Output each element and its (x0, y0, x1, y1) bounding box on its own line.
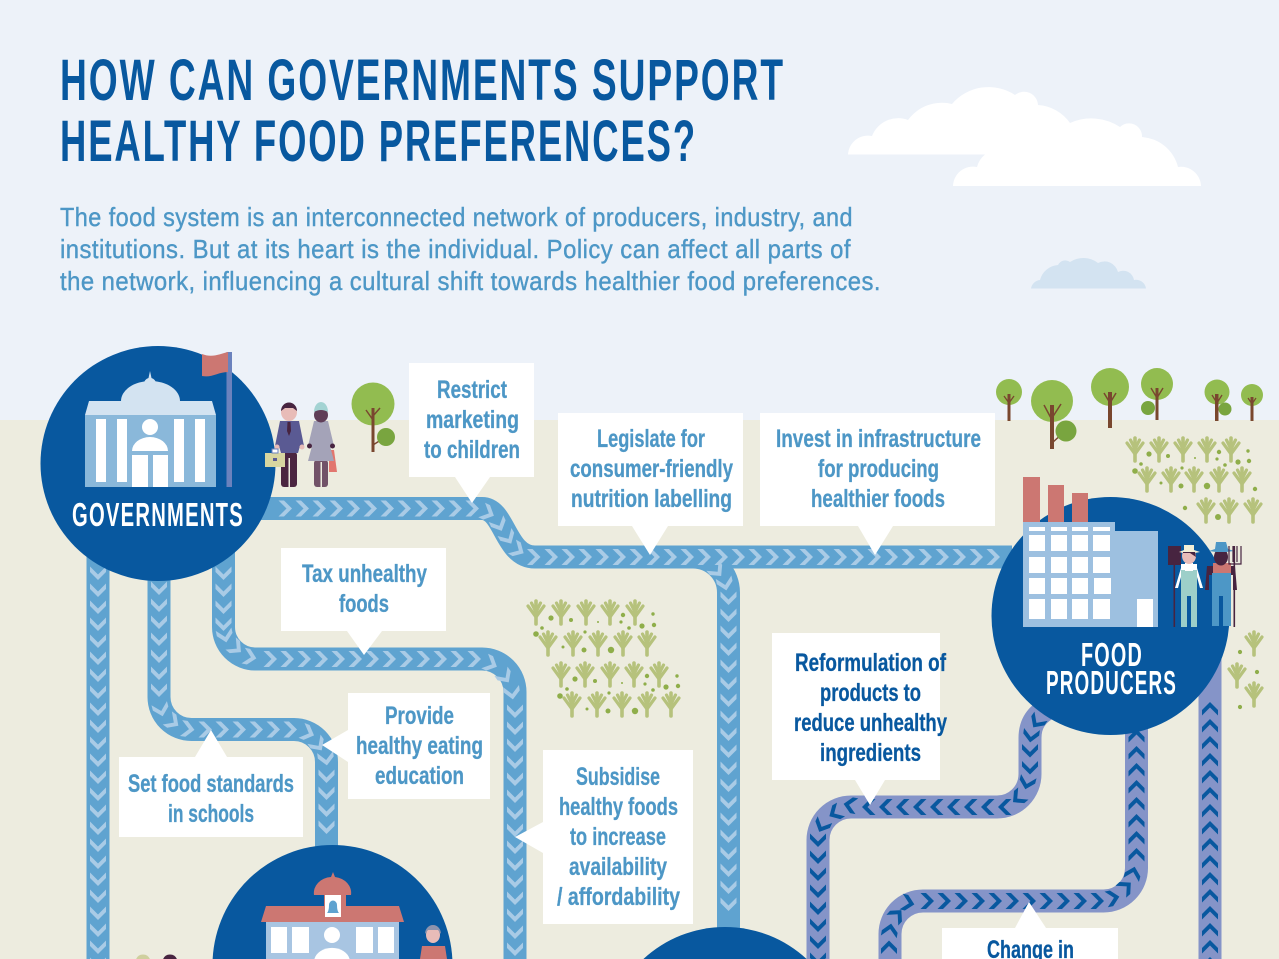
crop field: upper right (1127, 438, 1261, 522)
callout: restrict marketing: Restrict (437, 376, 508, 404)
callout: restrict marketing: to children (424, 436, 520, 464)
callout: subsidise healthy foods: / affordability (557, 883, 680, 911)
tree beside people (352, 382, 395, 452)
intro text: the network, influencing a cultural shift towards healthier food preferences. (60, 266, 881, 296)
person: teacher (420, 925, 447, 959)
path: change in route (881, 725, 1148, 959)
callout: invest in infrastructure: healthier foods (811, 485, 945, 513)
callout: nutrition labelling: consumer-friendly (570, 455, 733, 483)
callout: reformulation of products: products to (820, 679, 921, 707)
callout: food standards in schools: in schools (168, 800, 254, 828)
callout: tax unhealthy foods (281, 548, 446, 655)
callout: healthy eating education: Provide (385, 702, 454, 730)
callout: food standards in schools (119, 730, 303, 837)
callout: reformulation of products: Reformulation of (795, 649, 947, 677)
label: food producers: PRODUCERS (1046, 664, 1177, 701)
callout: subsidise healthy foods: availability (569, 853, 667, 881)
label: food producers: FOOD (1081, 636, 1143, 673)
callout: invest in infrastructure: for producing (818, 455, 939, 483)
large white clouds (848, 87, 1201, 186)
callout: subsidise healthy foods: Subsidise (576, 763, 660, 791)
label: food producers (1046, 636, 1177, 701)
path: far right vertical (1198, 650, 1222, 959)
trees on horizon (996, 368, 1263, 449)
callout: subsidise healthy foods (515, 750, 693, 924)
callout: invest in infrastructure (760, 413, 995, 555)
intro text (60, 202, 881, 296)
callout: change in (942, 902, 1118, 959)
callout: subsidise healthy foods: healthy foods (559, 793, 678, 821)
circle: schools (213, 845, 452, 959)
callout: food standards in schools: Set food standards (128, 770, 294, 798)
callout: nutrition labelling: nutrition labelling (571, 485, 732, 513)
background: sky (0, 0, 1279, 420)
callout: nutrition labelling (558, 413, 743, 555)
callout: tax unhealthy foods: Tax unhealthy (302, 560, 427, 588)
callout: restrict marketing (409, 363, 534, 503)
callout: reformulation of products: reduce unhealthy (794, 709, 947, 737)
callout: restrict marketing: marketing (426, 406, 519, 434)
people: man and woman (265, 402, 337, 487)
title (60, 48, 785, 174)
callout: invest in infrastructure: Invest in infrastructure (776, 425, 981, 453)
callout: reformulation of products: ingredients (820, 739, 921, 767)
title: HEALTHY FOOD PREFERENCES? (60, 109, 697, 174)
path: governments to schools (148, 560, 338, 860)
circle: food producers (992, 477, 1241, 735)
background: ground (0, 420, 1279, 959)
icon: factory (1023, 477, 1158, 627)
path: reformulation route (806, 706, 1052, 959)
intro text: institutions. But at its heart is the individual. Policy can affect all parts of (60, 234, 851, 264)
small blue cloud (1031, 258, 1146, 288)
callout: healthy eating education (322, 693, 490, 799)
crop field: centre (528, 601, 680, 716)
icon: government building (85, 371, 216, 487)
circle: centre node (643, 927, 807, 959)
icon: flag (202, 352, 232, 487)
icon: school building (261, 872, 404, 959)
callout: tax unhealthy foods: foods (339, 590, 389, 618)
callout: healthy eating education: education (375, 762, 464, 790)
title: HOW CAN GOVERNMENTS SUPPORT (60, 48, 785, 113)
path: tax and subsidise route (212, 540, 526, 959)
callout: reformulation of products (772, 633, 947, 805)
label: governments: GOVERNMENTS (72, 496, 244, 533)
callout: nutrition labelling: Legislate for (597, 425, 705, 453)
path: governments to food producers (250, 497, 1012, 592)
people: bottom left heads (136, 954, 177, 959)
circle: governments (40, 346, 276, 581)
crop field: lower right (1229, 632, 1262, 709)
callout: healthy eating education: healthy eating (356, 732, 483, 760)
callout: subsidise healthy foods: to increase (570, 823, 666, 851)
path: far left vertical (86, 550, 110, 959)
people: farmers (1168, 542, 1241, 627)
path: branch down to centre circle (693, 557, 740, 935)
intro text: The food system is an interconnected network of producers, industry, and (60, 202, 853, 232)
